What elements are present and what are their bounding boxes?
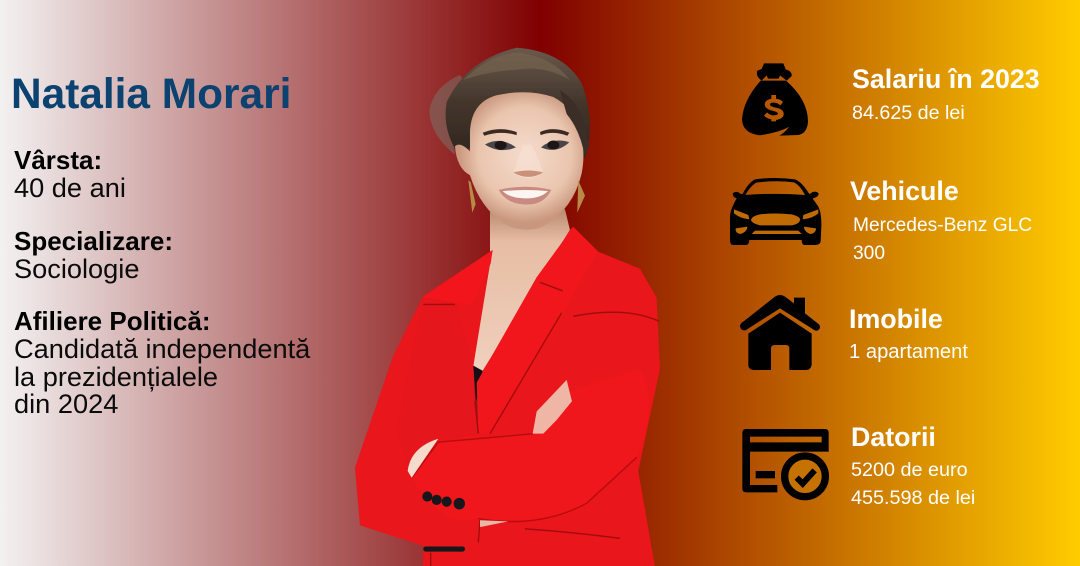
stat: vehicles <box>850 176 1032 264</box>
text block: specialization <box>14 226 173 284</box>
stat: vehicles: 300 <box>853 243 885 264</box>
stat: debts <box>851 422 975 509</box>
text block: political affiliation: Afiliere Politică: <box>14 306 210 336</box>
stat: debts: 5200 de euro <box>851 459 968 481</box>
stat: debts: 455.598 de lei <box>851 487 975 509</box>
stat: real estate <box>849 304 968 363</box>
stat: salary: 84.625 de lei <box>852 102 965 124</box>
text block: age <box>14 145 126 203</box>
stat: salary <box>852 64 1040 124</box>
text block: specialization: Sociologie <box>14 253 139 284</box>
stat: vehicles: Vehicule <box>850 176 959 206</box>
text block: age: Vârsta: <box>14 145 102 175</box>
text block: political affiliation: Candidată independentă <box>14 333 310 364</box>
stat: vehicles: Mercedes-Benz GLC <box>853 215 1032 236</box>
stat: salary: Salariu în 2023 <box>852 64 1040 94</box>
text block: political affiliation <box>14 306 310 419</box>
stat: real estate: Imobile <box>849 304 943 334</box>
text block: political affiliation: din 2024 <box>14 388 118 419</box>
title: name: Natalia Morari <box>11 70 291 117</box>
stat: real estate: 1 apartament <box>849 341 968 363</box>
stat: debts: Datorii <box>851 422 936 452</box>
text block: specialization: Specializare: <box>14 226 173 256</box>
text block: age: 40 de ani <box>14 172 126 203</box>
text block: political affiliation: la prezidențialele <box>14 360 218 392</box>
